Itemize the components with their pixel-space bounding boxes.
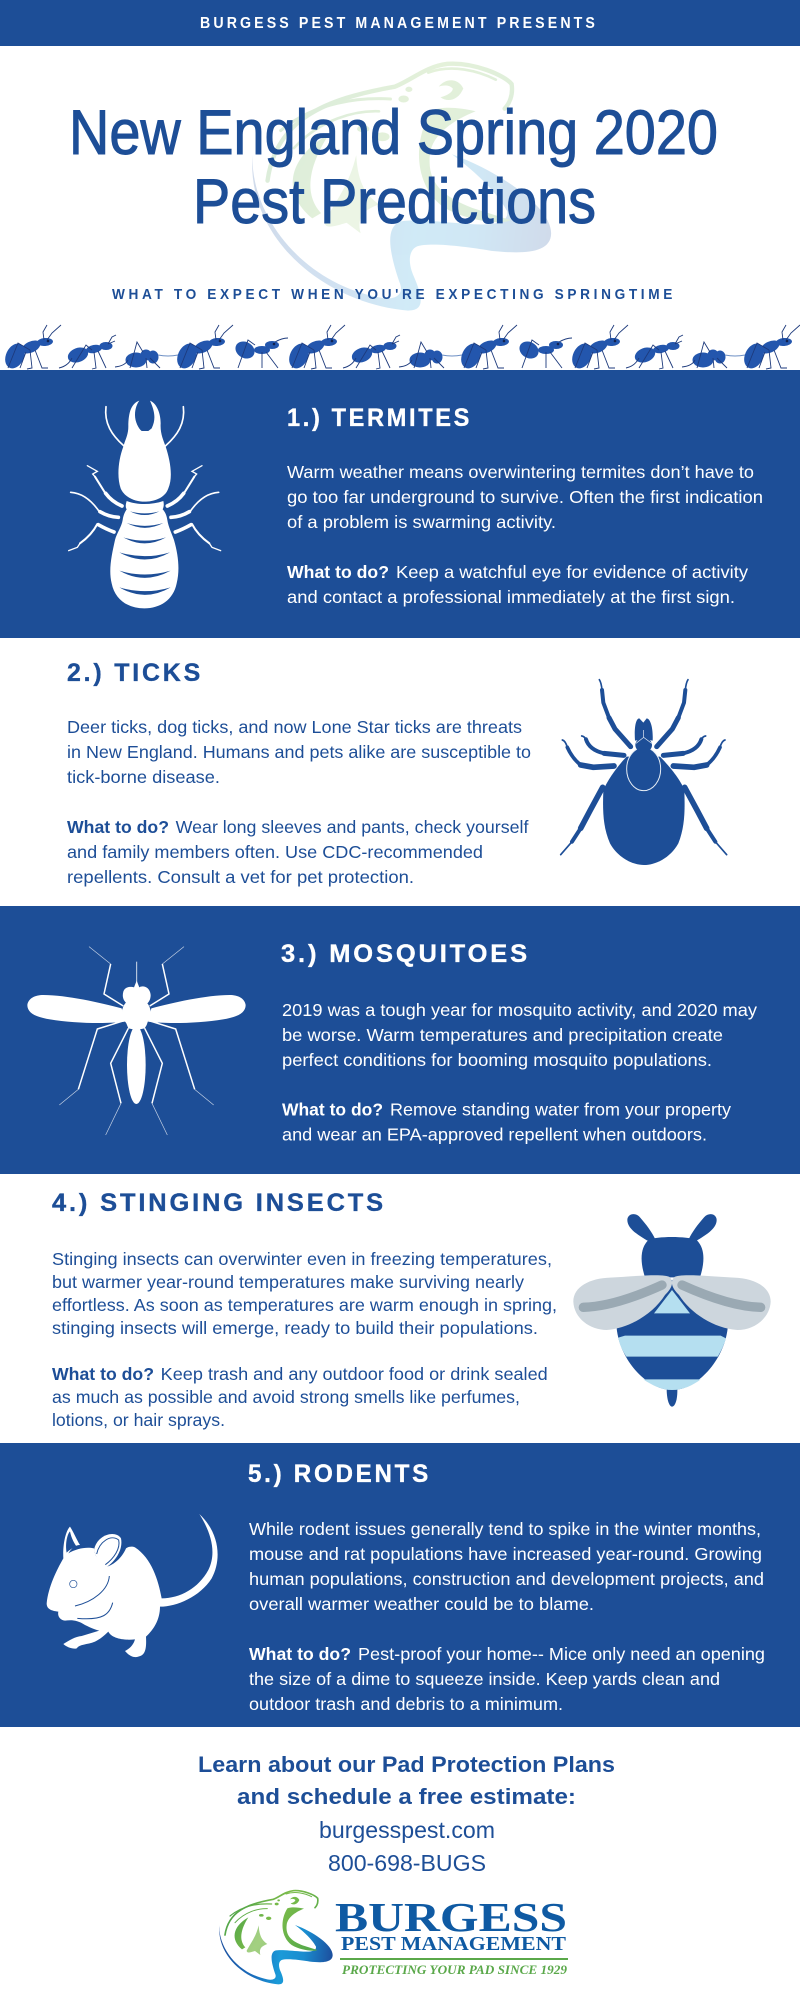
text block: mosquitoes — [282, 1000, 757, 1144]
subtitle: WHAT TO EXPECT WHEN YOU'RE EXPECTING SPRINGTIME — [112, 286, 676, 303]
logo wordmark: PEST MANAGEMENT — [341, 1934, 566, 1955]
text block: rodents: outdoor trash and debris to a minimum. — [249, 1694, 563, 1714]
heading: stinging insects: 4.) STINGING INSECTS — [52, 1189, 386, 1217]
heading: rodents: 5.) RODENTS — [248, 1460, 431, 1488]
call to action: 800-698-BUGS — [328, 1850, 486, 1876]
header banner — [0, 0, 800, 46]
text block: stinging insects: effortless. As soon as temperatures are warm enough in spring, — [52, 1295, 557, 1315]
text block: ticks: Wear long sleeves and pants, check yourself — [176, 817, 529, 837]
panel: termites — [0, 370, 800, 638]
call to action: burgesspest.com — [319, 1817, 495, 1843]
text block: stinging insects: What to do? — [52, 1364, 154, 1384]
text block: ticks: and family members often. Use CDC-recommended — [67, 842, 483, 862]
text block: rodents: What to do? — [249, 1644, 351, 1664]
logo: Burgess Pest Management — [219, 1891, 568, 1984]
call to action: Learn about our Pad Protection Plans — [198, 1752, 615, 1777]
text block: rodents: overall warmer weather could be to blame. — [249, 1594, 594, 1614]
text block: termites: What to do? — [287, 562, 389, 582]
icon: bee — [573, 1214, 771, 1407]
call to action: and schedule a free estimate: — [237, 1784, 576, 1809]
panel: rodents — [0, 1443, 800, 1727]
panel: ticks — [67, 659, 727, 887]
icon: mouse — [47, 1514, 218, 1657]
ant border row — [1, 325, 800, 372]
text block: rodents: human populations, construction and development projects, and — [249, 1569, 764, 1589]
text block: termites — [287, 462, 763, 607]
text block: stinging insects: lotions, or hair sprays. — [52, 1410, 225, 1430]
heading: termites: 1.) TERMITES — [287, 404, 472, 432]
icon: mosquito — [27, 947, 246, 1135]
text block: ticks: repellents. Consult a vet for pet protection. — [67, 867, 414, 887]
text block: stinging insects: stinging insects will emerge, ready to build their populations. — [52, 1318, 538, 1338]
text block: ticks: What to do? — [67, 817, 169, 837]
text block: stinging insects: Stinging insects can overwinter even in freezing temperatures, — [52, 1249, 552, 1269]
text block: termites: and contact a professional immediately at the first sign. — [287, 587, 735, 607]
text block: mosquitoes: Remove standing water from your property — [390, 1100, 731, 1120]
panel: mosquitoes — [0, 906, 800, 1174]
text block: mosquitoes: perfect conditions for booming mosquito populations. — [282, 1050, 712, 1070]
icon: termite — [69, 401, 221, 608]
icon: tick — [561, 680, 727, 865]
watermark: frog logo — [252, 64, 551, 311]
text block: mosquitoes: 2019 was a tough year for mosquito activity, and 2020 may — [282, 1000, 757, 1020]
text block: rodents — [249, 1519, 765, 1714]
text block: stinging insects — [52, 1249, 557, 1430]
text block: ticks: tick-borne disease. — [67, 767, 220, 787]
logo wordmark: PROTECTING YOUR PAD SINCE 1929 — [342, 1963, 568, 1977]
text block: termites: of a problem is swarming activity. — [287, 512, 556, 532]
text block: mosquitoes: and wear an EPA-approved repellent when outdoors. — [282, 1124, 707, 1144]
text block: ticks — [67, 717, 531, 887]
panel: stinging insects — [52, 1189, 771, 1430]
text block: rodents: the size of a dime to squeeze inside. Keep yards clean and — [249, 1669, 720, 1689]
text block: rodents: mouse and rat populations have increased year-round. Growing — [249, 1544, 762, 1564]
logo wordmark — [335, 1894, 568, 1977]
text block: stinging insects: Keep trash and any outdoor food or drink sealed — [161, 1364, 548, 1384]
title: Pest Predictions — [193, 167, 596, 237]
header banner: BURGESS PEST MANAGEMENT PRESENTS — [200, 15, 598, 32]
text block: rodents: Pest-proof your home-- Mice only need an opening — [358, 1644, 765, 1664]
text block: ticks: in New England. Humans and pets alike are susceptible to — [67, 742, 531, 762]
text block: termites: go too far underground to survive. Often the first indication — [287, 487, 763, 507]
text block: stinging insects: but warmer year-round temperatures make surviving nearly — [52, 1272, 524, 1292]
call to action — [198, 1752, 615, 1876]
text block: termites: Keep a watchful eye for evidence of activity — [396, 562, 748, 582]
text block: termites: Warm weather means overwintering termites don’t have to — [287, 462, 754, 482]
icon: frog logo — [219, 1891, 333, 1984]
text block: rodents: While rodent issues generally tend to spike in the winter months, — [249, 1519, 761, 1539]
title: New England Spring 2020 — [69, 98, 718, 168]
heading: ticks: 2.) TICKS — [67, 659, 203, 687]
text block: stinging insects: as much as possible and avoid strong smells like perfumes, — [52, 1387, 520, 1407]
text block: ticks: Deer ticks, dog ticks, and now Lone Star ticks are threats — [67, 717, 522, 737]
logo wordmark: BURGESS — [335, 1894, 567, 1940]
heading: mosquitoes: 3.) MOSQUITOES — [281, 940, 530, 968]
text block: mosquitoes: What to do? — [282, 1100, 383, 1120]
title — [69, 98, 718, 237]
text block: mosquitoes: be worse. Warm temperatures and precipitation create — [282, 1025, 723, 1045]
